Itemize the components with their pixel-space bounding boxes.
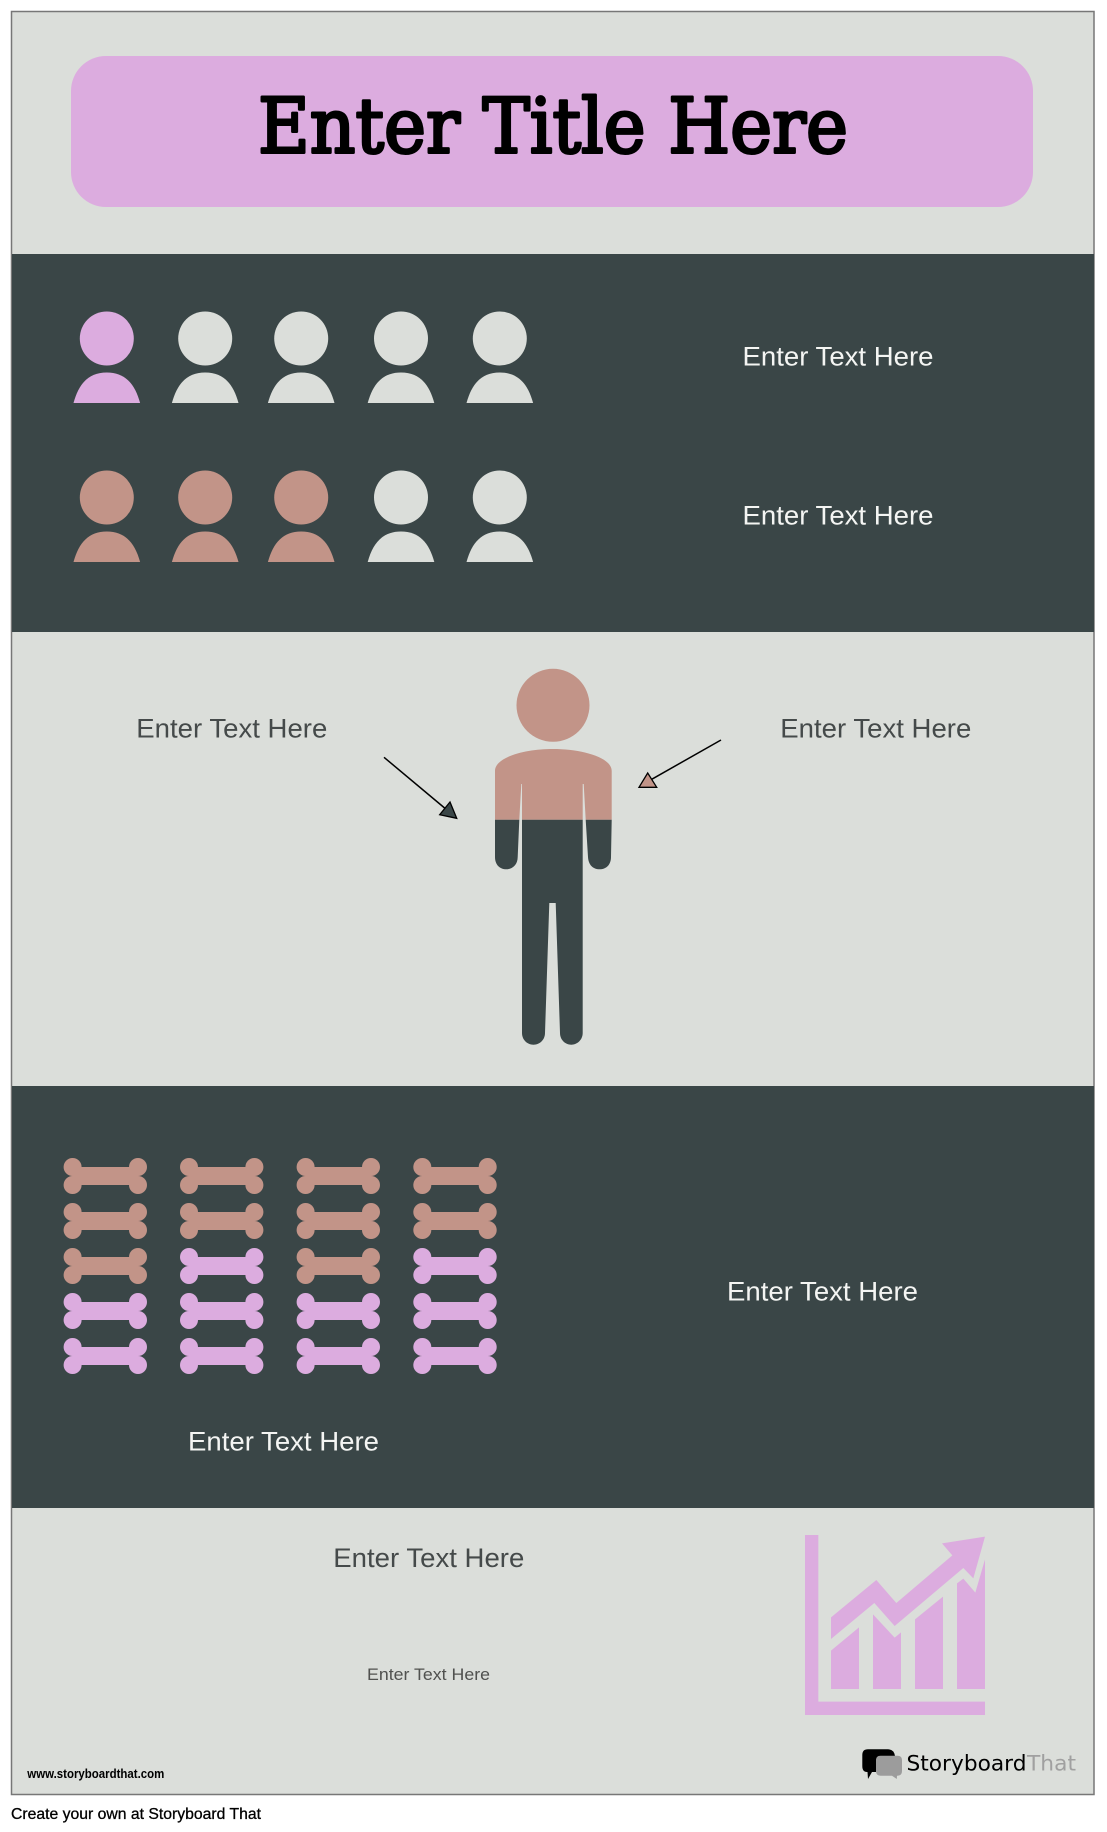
footer credit: Create your own at Storyboard That bbox=[11, 1806, 262, 1823]
arrow: left bbox=[384, 757, 457, 818]
icon row: one of five people bbox=[74, 312, 533, 403]
logo: Storyboard That bbox=[862, 1749, 1076, 1779]
text: caption: Enter Text Here bbox=[367, 1665, 490, 1684]
text: right label: Enter Text Here bbox=[727, 1276, 918, 1306]
icon: growth chart bbox=[805, 1535, 985, 1715]
text: row two label: Enter Text Here bbox=[742, 500, 934, 530]
title pill bbox=[71, 56, 1033, 207]
icon: speech bubbles bbox=[862, 1749, 902, 1779]
logo wordmark: Storyboard bbox=[906, 1752, 1026, 1777]
text: row one label: Enter Text Here bbox=[742, 342, 934, 372]
icon: human figure bbox=[495, 669, 612, 1045]
icon grid: bones bbox=[64, 1158, 497, 1374]
title: Enter Title Here bbox=[258, 82, 848, 170]
website url: www.storyboardthat.com bbox=[26, 1766, 164, 1781]
panel: footer chart bbox=[333, 1535, 985, 1715]
panel: bones bbox=[12, 1086, 1094, 1508]
logo wordmark: That: That bbox=[1026, 1752, 1076, 1777]
panel: people counts bbox=[12, 254, 1094, 632]
text: left label: Enter Text Here bbox=[136, 714, 327, 744]
text: right label: Enter Text Here bbox=[780, 714, 971, 744]
text: heading: Enter Text Here bbox=[333, 1543, 524, 1573]
dark band bbox=[12, 254, 1094, 632]
icon row: three of five people bbox=[74, 470, 533, 562]
panel: title header bbox=[71, 56, 1033, 207]
arrow: right bbox=[639, 740, 721, 787]
panel: human figure bbox=[136, 669, 971, 1045]
dark band bbox=[12, 1086, 1094, 1508]
text: under bones label: Enter Text Here bbox=[188, 1426, 379, 1456]
